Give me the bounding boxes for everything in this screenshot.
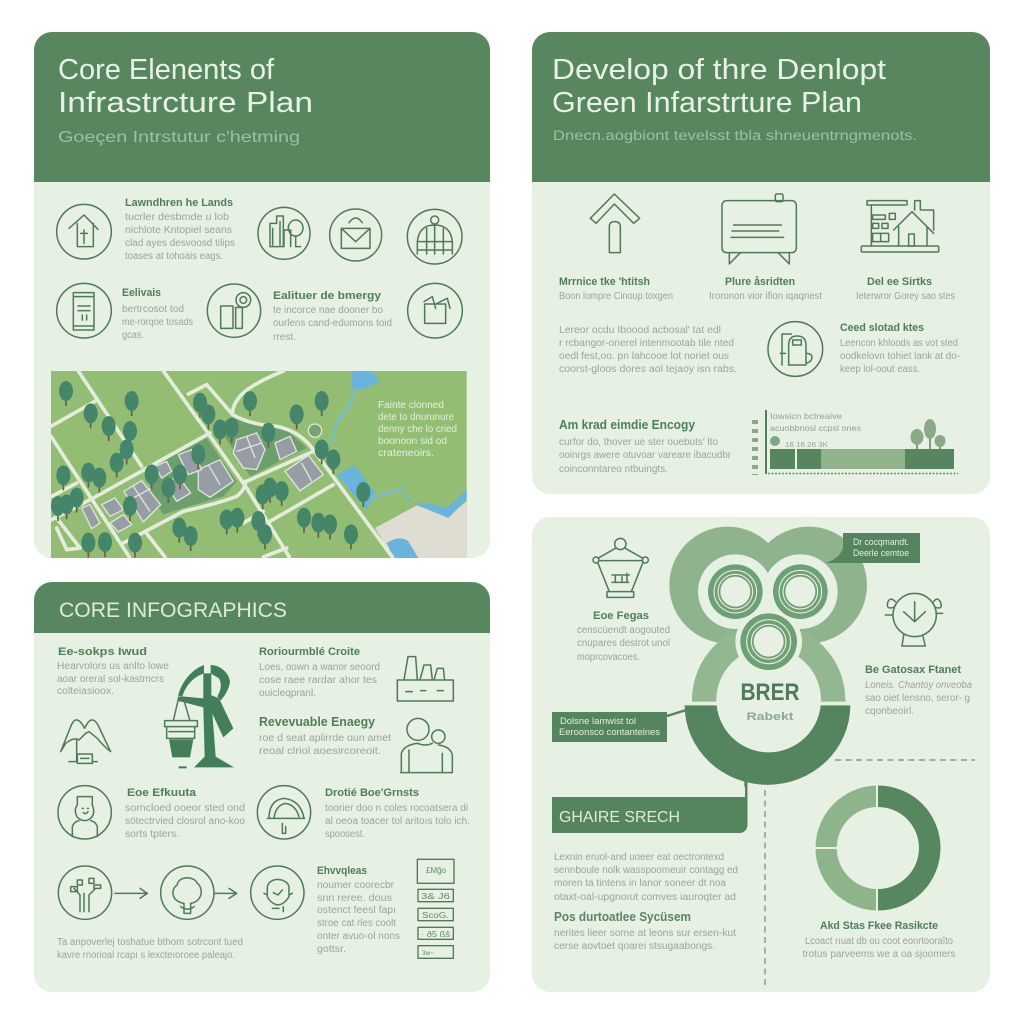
- map: buildings: [82, 433, 323, 532]
- text: energy: Am krad eimdie Encogy: [559, 418, 695, 432]
- map caption: [378, 400, 457, 459]
- table labels: 3& J6: [421, 892, 451, 901]
- text: be gatosax: sao oiet lensno, seror- g: [865, 693, 970, 704]
- text: ehvvqleas: noumer coorecbr: [317, 880, 395, 891]
- text: be gatosax: [865, 664, 972, 717]
- text: eelivais: gcas.: [122, 330, 144, 341]
- text: cerd slotad: oodkelovn tohiet lank at do-: [840, 351, 960, 362]
- bar chart: 16 16 26 3K: [785, 440, 828, 449]
- text: efkuuta: sorncloed ooeor sted ond: [125, 803, 245, 814]
- icons: core infographics: [61, 657, 453, 773]
- text: energy: ooinrgs awere otuvoar vareare ibacudbr: [559, 450, 732, 461]
- text: renewable create: [259, 646, 380, 699]
- table labels: £Mĝo: [426, 866, 447, 875]
- text: pos system: Pos durtoatlee Sycüsem: [554, 910, 691, 924]
- text: eoe fegas: [577, 610, 670, 663]
- text: renewable create: ouicleqpranl.: [259, 688, 316, 699]
- panel: core infographics: [34, 582, 490, 992]
- text: paragraph: oedl fest,oo. pn lahcooe lot noriet ous: [559, 351, 729, 362]
- callout: left: Dolsne lamwist tol: [560, 716, 636, 727]
- text: renewable create: Loes, oown a wanor seoord: [259, 662, 380, 673]
- section bar: [552, 780, 748, 833]
- text: efkuuta: sötectrvied closrol ano-koo: [125, 816, 245, 827]
- text: ehvvqleas: Ehvvqleas: [317, 865, 367, 877]
- text: section body: otaxt-oal-upgnoıut comves iauroqter ad: [554, 892, 736, 903]
- figure: person with bucket: [165, 665, 234, 767]
- text: ee sokps: colteiasioox.: [57, 686, 114, 697]
- text: energy: coinconntareo ntbuingts.: [559, 464, 668, 475]
- text: energy: te incorce nae dooner bo: [273, 305, 383, 316]
- header: develop plan: Develop of thre Denlopt: [552, 54, 886, 86]
- table labels: · ð5 ßš: [421, 930, 450, 939]
- table labels: 3w~: [422, 951, 435, 957]
- text: paragraph: r rcbangor-onerel intenmootab tile nted: [559, 338, 734, 349]
- map: roads: [51, 371, 392, 557]
- text: energy: rrest.: [273, 332, 296, 343]
- text: renewable energy: Revevuable Enaegy: [259, 715, 375, 729]
- bar chart: [755, 410, 958, 475]
- header: core elements: Core Elenents of: [58, 54, 275, 86]
- text: three columns: [559, 276, 955, 302]
- text: energy: Ealituer de bmergy: [273, 290, 382, 302]
- diagram: center label: Rabekt: [746, 711, 794, 723]
- text: energy: [273, 290, 392, 343]
- text: ee sokps: [57, 646, 169, 697]
- callout: top right: Dr cocqmandt.: [853, 537, 909, 548]
- text: donut caption: trotus parveems we a oa sjoomers: [802, 949, 956, 960]
- header: core elements: Infrastrcture Plan: [58, 87, 313, 119]
- panel: develop plan: [532, 32, 990, 494]
- text: pos system: nerites lieer some at leons sur ersen-kut: [554, 928, 736, 939]
- text: three columns: Ieterwror Gorey sao stes: [856, 291, 955, 302]
- text: section body: sennboule nolk wasspoomeuir contagg ed: [554, 865, 738, 876]
- panel: central diagram: [532, 517, 990, 992]
- text: efkuuta: sorts tpters.: [125, 829, 179, 840]
- text: pos system: cerse aovtoet qoarei stsugaabongs.: [554, 941, 715, 952]
- text: paragraph: Lereor ocdu Iboood acbosal' tat edl: [559, 325, 721, 336]
- text: ehvvqleas: onter avuo-ol nons: [317, 931, 400, 942]
- text: section body: [554, 852, 738, 903]
- header: develop plan: [532, 32, 990, 182]
- header: core elements: Goeçen Intrstutur c'hetming: [58, 129, 300, 146]
- text: paragraph: [559, 325, 737, 375]
- diagram: center label: BRER: [740, 679, 800, 706]
- text: be gatosax: Loneis. Chantoy onveoba: [865, 680, 972, 691]
- callout: top right: Deerle cemtoe: [853, 548, 909, 559]
- text: eelivais: bertrcosot tod: [122, 304, 184, 315]
- text: energy: ourlens cand-edumons toid: [273, 318, 392, 329]
- text: ehvvqleas: stroe cat rles coolt: [317, 918, 396, 929]
- text: eelivais: Eelivais: [122, 287, 161, 299]
- icons: circle row: [58, 786, 454, 958]
- text: cerd slotad: Leencon khloods as vot sted: [840, 338, 958, 349]
- text: eelivais: me-rorqoe tosads: [122, 317, 193, 328]
- text: ehvvqleas: [317, 865, 400, 955]
- text: lands: toases at tohoais eags.: [125, 251, 223, 262]
- text: cerd slotad: Ceed slotad ktes: [840, 322, 924, 334]
- callout: left: [552, 710, 686, 742]
- text: caption row: kavre rnorioal rcapı s lexcteıoroee paleajo.: [57, 950, 235, 961]
- text: lands: nichlote Kntopiel seans: [125, 225, 232, 236]
- text: efkuuta: [125, 787, 245, 840]
- text: ee sokps: Hearvolors us anlto lowe: [57, 661, 169, 672]
- icons: core elements circles: [57, 204, 462, 338]
- dashed dividers: [765, 760, 975, 988]
- text: lands: clad ayes desvoosd tilips: [125, 238, 235, 249]
- text: eoe fegas: censcüendt aogouted: [577, 625, 670, 636]
- text: cerd slotad: [840, 322, 960, 375]
- diagram: center label: [740, 679, 800, 723]
- icons: jar and clock: [593, 538, 943, 646]
- table labels: ScoG.: [422, 911, 449, 920]
- text: ehvvqleas: gottsr.: [317, 944, 346, 955]
- map caption: boonoon sid od: [378, 436, 447, 447]
- text: section body: Lexnin eruol-and uoeer eat oectrontexd: [554, 852, 724, 863]
- map caption: dete to dnurunure: [378, 412, 454, 423]
- text: drotie: toorier doo n coles rocoatsera di: [325, 803, 468, 814]
- text: renewable create: cose raee rardar ahor tes: [259, 675, 377, 686]
- text: three columns: Del ee Sirtks: [867, 276, 932, 288]
- text: three columns: Boon lompre Cinoup toxgen: [559, 291, 673, 302]
- bar chart: acuobbnosl ccpsl ones: [770, 423, 861, 433]
- text: eoe fegas: moprcovacoes.: [577, 652, 640, 663]
- header: core infographics: CORE INFOGRAPHICS: [59, 599, 287, 622]
- text: renewable energy: roe d seat aplirrde oun amet: [259, 733, 391, 744]
- header: core elements: [34, 32, 490, 182]
- map: trees: [51, 381, 370, 558]
- bar chart: Iowsicn bctreaive: [770, 411, 842, 421]
- text: be gatosax: cqonbeoirl.: [865, 706, 914, 717]
- header: core infographics: [34, 582, 490, 633]
- text: energy: curfor do, thover ue ster ouebuts' lto: [559, 437, 718, 448]
- text: efkuuta: Eoe Efkuuta: [127, 787, 197, 799]
- text: donut caption: [802, 920, 956, 960]
- text: be gatosax: Be Gatosax Ftanet: [865, 664, 961, 676]
- text: drotie: Drotié Boe'Grnsts: [325, 787, 419, 799]
- map caption: Fainte clonned: [378, 400, 444, 411]
- text: lands: [125, 197, 235, 262]
- text: energy: [559, 418, 732, 475]
- map: [51, 371, 467, 558]
- text: paragraph: coorst-gloos dores aol tejaoy isn rabs.: [559, 364, 737, 375]
- map: building grounds: [150, 418, 307, 515]
- map caption: crateneoirs.: [378, 448, 434, 459]
- text: cerd slotad: keep lol-oout eass.: [840, 364, 920, 375]
- text: ehvvqleas: ostenct feesl fapı: [317, 905, 396, 916]
- text: ehvvqleas: snn reree. dous: [317, 893, 392, 904]
- text: renewable energy: reoal clriol aoesircoreoit.: [259, 746, 381, 757]
- table labels: [421, 866, 451, 957]
- diagram: rings: [669, 527, 867, 787]
- text: ee sokps: aoar oreral sol-kastmcrs: [57, 674, 164, 685]
- text: donut caption: Akd Stas Fkee Rasikcte: [820, 920, 938, 932]
- text: lands: Lawndhren he Lands: [125, 197, 233, 209]
- text: lands: tucrler desbmde u lob: [125, 212, 229, 223]
- section bar: GHAIRE SRECH: [559, 809, 680, 826]
- callout: top right: [826, 533, 920, 563]
- text: donut caption: Lcoact rıuat db ou coot eonrtooraîto: [805, 936, 953, 947]
- text: ee sokps: Ee-sokps Iwud: [58, 646, 147, 658]
- donut chart: [816, 786, 940, 910]
- text: drotie: [325, 787, 470, 840]
- text: three columns: Mrrnice tke 'htitsh: [559, 276, 650, 288]
- text: caption row: [57, 937, 243, 961]
- header: develop plan: Dnecn.aogbiont tevelsst tbla shneuentrngmenots.: [553, 128, 917, 143]
- text: eelivais: [122, 287, 193, 341]
- text: eoe fegas: Eoe Fegas: [593, 610, 649, 622]
- text: renewable create: Roriourmblé Croite: [259, 646, 360, 658]
- text: renewable energy: [259, 715, 391, 757]
- text: section body: moren ta tintens in lanor soneer dt noa: [554, 878, 726, 889]
- text: three columns: Iroronon vior ifion iqaqriest: [709, 291, 822, 302]
- callout: left: Eeroonsco contanteines: [559, 727, 660, 738]
- text: eoe fegas: cnupares destrot unol: [577, 638, 670, 649]
- text: pos system: [554, 910, 736, 952]
- panel: core elements: [34, 32, 490, 558]
- header: develop plan: Green Infarstrture Plan: [552, 87, 862, 119]
- icons: develop plan: [590, 194, 939, 376]
- text: three columns: Plure åsridten: [725, 276, 795, 288]
- text: drotie: spoosest.: [325, 829, 365, 840]
- text: drotie: al oeoa toacer tol aritoıs tolo ich.: [325, 816, 470, 827]
- map caption: denny che lo cried: [378, 424, 457, 435]
- map: sand and water: [308, 371, 467, 558]
- text: caption row: Ta anpoverlej toshatue bthom sotrcont tued: [57, 937, 243, 948]
